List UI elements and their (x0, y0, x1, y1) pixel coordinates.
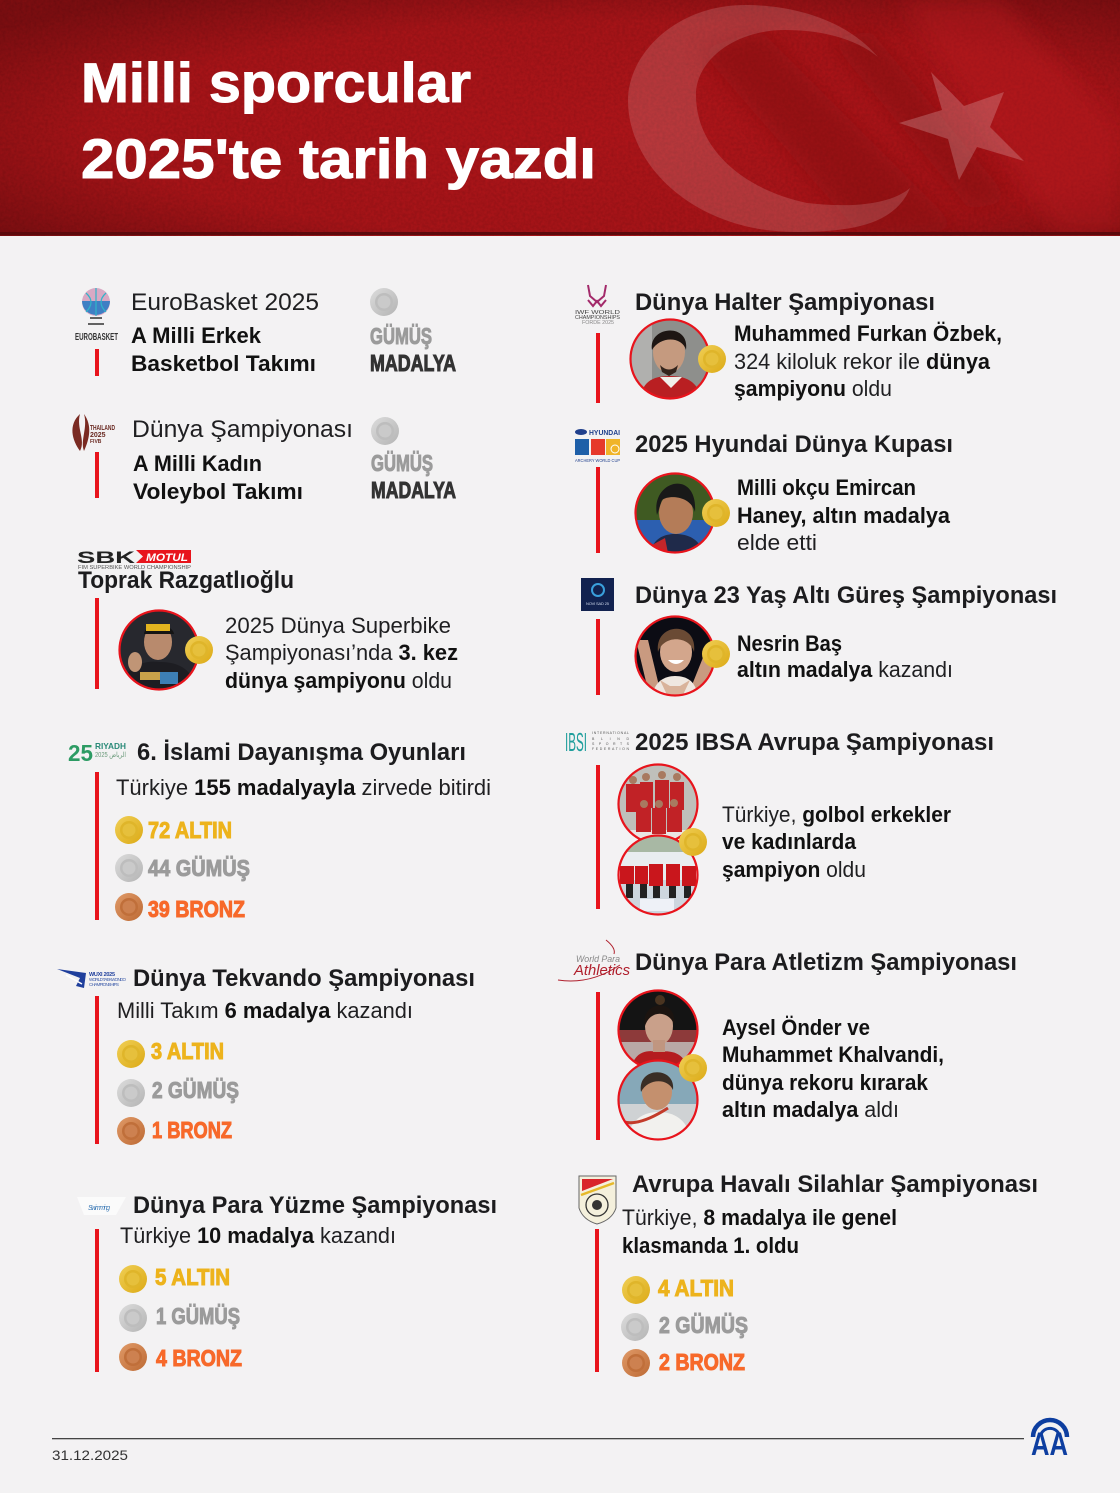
gold count (119, 1264, 230, 1293)
heading: Avrupa Havalı Silahlar Şampiyonası (632, 1171, 1038, 1198)
description: Aysel Önder ve (722, 1015, 870, 1040)
description: dünya rekoru kırarak (722, 1070, 929, 1095)
panel: Avrupa Havalı Silahlar Şampiyonası (579, 1171, 1038, 1377)
silver count (117, 1077, 239, 1107)
description: 324 kiloluk rekor ile dünya (734, 349, 991, 374)
icon: silver medal (370, 288, 398, 316)
logo: Para Swimming: Swimming (88, 1205, 110, 1212)
logo: Wuxi 2025: CHAMPIONSHIPS (89, 982, 119, 987)
description: Haney, altın madalya (737, 503, 951, 528)
heading: Dünya 23 Yaş Altı Güreş Şampiyonası (635, 582, 1057, 609)
team name: A Milli Erkek (131, 323, 262, 348)
accent bar (95, 349, 99, 376)
accent bar (95, 772, 99, 920)
bronze count: 1 BRONZ (152, 1117, 232, 1143)
logo: Riyadh 2025 (68, 740, 126, 766)
panel: 6. İslami Dayanışma Oyunları (68, 739, 491, 922)
team name: Basketbol Takımı (131, 351, 316, 376)
bronze count (117, 1117, 232, 1145)
icon: gold medal (185, 636, 213, 664)
logo: IWF: IWF WORLD (575, 310, 620, 316)
logo: Riyadh 2025: 25 (68, 740, 93, 766)
medal label: MADALYA (370, 350, 456, 376)
athlete name: Toprak Razgatlıoğlu (78, 567, 294, 594)
accent bar (596, 467, 600, 553)
title: 2025'te tarih yazdı (81, 127, 596, 190)
description (722, 802, 951, 882)
logo: Wuxi 2025 (57, 969, 126, 988)
description: Şampiyonası’nda 3. kez (225, 640, 458, 665)
photo: goalball men team (618, 764, 698, 844)
logo: IBSA: INTERNATIONAL (592, 731, 629, 735)
silver count: 2 GÜMÜŞ (659, 1312, 748, 1338)
logo: Wuxi 2025: WUXI 2025 (89, 972, 115, 978)
accent bar (95, 996, 99, 1144)
event heading: EuroBasket 2025 (131, 289, 319, 316)
icon: gold medal (679, 828, 707, 856)
gold count: 5 ALTIN (155, 1264, 230, 1290)
accent bar (596, 992, 600, 1140)
description (722, 1015, 944, 1122)
logo: Hyundai Archery World Cup (575, 429, 620, 463)
crescent (628, 5, 910, 232)
gold count (117, 1038, 224, 1068)
accent bar (95, 452, 99, 498)
description: altın madalya kazandı (737, 657, 953, 682)
description: ve kadınlarda (722, 829, 857, 854)
description: Milli okçu Emircan (737, 475, 916, 500)
logo: shooting federation shield (579, 1176, 616, 1224)
event heading: Dünya Şampiyonası (132, 416, 353, 443)
panel: Dünya 23 Yaş Altı Güreş Şampiyonası (581, 578, 1057, 697)
panel: Dünya Para Atletizm Şampiyonası (558, 940, 1017, 1142)
description: Türkiye, 8 madalya ile genel (622, 1205, 897, 1230)
logo: SBK Motul: MOTUL (146, 552, 188, 564)
description: Nesrin Baş (737, 631, 842, 656)
logo: Para Swimming (77, 1197, 126, 1215)
icon: AA logo: AA (1031, 1426, 1068, 1462)
icon: silver medal (371, 417, 399, 445)
gold count (622, 1275, 734, 1304)
heading: Dünya Para Yüzme Şampiyonası (133, 1192, 497, 1219)
star (899, 72, 1024, 180)
logo: volleyball championship: THAILAND (90, 425, 115, 432)
logo: World Para Athletics (558, 940, 630, 981)
panel: Dünya Para Yüzme Şampiyonası (77, 1192, 497, 1372)
bronze count: 4 BRONZ (156, 1345, 242, 1371)
logo: Hyundai Archery World Cup: HYUNDAI (589, 430, 620, 437)
medal label: GÜMÜŞ (371, 450, 433, 476)
heading: 6. İslami Dayanışma Oyunları (137, 739, 466, 766)
photo: Muhammed Furkan Özbek (630, 319, 710, 400)
gold count: 3 ALTIN (151, 1038, 224, 1064)
panel: 2025 Hyundai Dünya Kupası (575, 429, 953, 555)
description (737, 475, 951, 555)
description (622, 1205, 897, 1258)
logo: EuroBasket: EUROBASKET (75, 332, 118, 343)
photo: Muhammet Khalvandi (618, 1060, 698, 1142)
silver count (115, 854, 250, 882)
bronze count (115, 893, 245, 922)
gold count: 72 ALTIN (148, 817, 232, 843)
footer rule (52, 1438, 1024, 1439)
description: Milli Takım 6 madalya kazandı (117, 998, 413, 1023)
bronze count (119, 1343, 242, 1371)
icon: gold medal (679, 1054, 707, 1082)
logo: Riyadh 2025: RIYADH (95, 741, 126, 751)
logo: Riyadh 2025: 2025 الرياض (95, 751, 126, 759)
logo: Wuxi 2025: WORLD TAEKWONDO (89, 977, 126, 982)
logo: IWF: CHAMPIONSHIPS (575, 315, 620, 321)
logo: IBSA: IBSI (565, 727, 587, 757)
photo: goalball women team (618, 835, 698, 915)
description: Türkiye 10 madalya kazandı (120, 1223, 396, 1248)
icon: gold medal (698, 345, 726, 373)
silver count: 2 GÜMÜŞ (152, 1077, 239, 1103)
silver count (621, 1312, 748, 1341)
logo: Hyundai Archery World Cup: ARCHERY WORLD CUP (575, 458, 620, 463)
logo: World Para Athletics: World Para (576, 954, 620, 965)
description (734, 321, 1002, 401)
photo: Emircan Haney (635, 473, 715, 555)
medal label: MADALYA (371, 477, 456, 503)
description: altın madalya aldı (722, 1097, 899, 1122)
silver count (119, 1303, 240, 1332)
title (81, 51, 596, 190)
description (737, 631, 953, 682)
accent bar (596, 333, 600, 403)
logo: SBK Motul: SBK (77, 548, 136, 567)
team name (131, 323, 316, 376)
logo: IBSA: BLIND (592, 737, 629, 741)
silver count: 1 GÜMÜŞ (156, 1303, 240, 1329)
logo: U23 wrestling (581, 578, 614, 611)
accent bar (95, 1229, 99, 1372)
header banner with flag (0, 0, 1120, 236)
panel: EuroBasket 2025 (75, 288, 456, 376)
bronze count: 2 BRONZ (659, 1349, 745, 1375)
heading: 2025 IBSA Avrupa Şampiyonası (635, 729, 994, 756)
heading: 2025 Hyundai Dünya Kupası (635, 431, 953, 458)
description: Muhammet Khalvandi, (722, 1042, 944, 1067)
panel: Dünya Şampiyonası voleybol (72, 414, 456, 504)
bronze count (622, 1349, 745, 1377)
description: klasmanda 1. oldu (622, 1233, 799, 1258)
logo: SBK Motul: FIM SUPERBIKE WORLD CHAMPIONSHIP (78, 565, 192, 571)
medal label (370, 323, 456, 376)
logo: IBSA: SPORTS (592, 742, 630, 746)
accent bar (596, 765, 600, 909)
team name: Voleybol Takımı (133, 479, 303, 504)
description: şampiyon oldu (722, 857, 866, 882)
logo: volleyball championship: 2025 (90, 432, 106, 439)
description: şampiyonu oldu (734, 376, 892, 401)
description: dünya şampiyonu oldu (225, 668, 452, 693)
logo: SBK Motul (77, 548, 192, 571)
heading: Dünya Halter Şampiyonası (635, 289, 935, 316)
silver count: 44 GÜMÜŞ (148, 855, 250, 881)
logo: IBSA: FEDERATION (592, 747, 629, 751)
logo: IWF: FORDE 2025 (582, 320, 614, 326)
heading: Dünya Tekvando Şampiyonası (133, 965, 475, 992)
description (225, 613, 458, 693)
logo: U23 wrestling: NOVI SAD 25 (586, 601, 610, 606)
accent bar (596, 619, 600, 695)
panel: Dünya Tekvando Şampiyonası (57, 965, 475, 1145)
photo: Toprak (119, 610, 199, 690)
heading: Dünya Para Atletizm Şampiyonası (635, 949, 1017, 976)
icon: gold medal (702, 499, 730, 527)
description: Türkiye, golbol erkekler (722, 802, 951, 827)
gold count (115, 816, 232, 844)
logo: IWF (575, 285, 620, 326)
panel: Dünya Halter Şampiyonası (575, 285, 1002, 403)
icon: gold medal (702, 640, 730, 668)
description: Türkiye 155 madalyayla zirvede bitirdi (116, 775, 491, 800)
medal label: GÜMÜŞ (370, 323, 432, 349)
description: elde etti (737, 530, 817, 555)
logo: volleyball championship: FIVB (90, 439, 102, 445)
panel: 2025 IBSA Avrupa Şampiyonası (565, 727, 994, 915)
date: 31.12.2025 (52, 1447, 128, 1463)
accent bar (595, 1229, 599, 1372)
panel: Toprak Razgatlıoğlu (77, 548, 458, 693)
logo: volleyball championship (72, 414, 115, 451)
title: Milli sporcular (81, 51, 471, 114)
logo: World Para Athletics: Athletics (573, 962, 630, 979)
description: Muhammed Furkan Özbek, (734, 321, 1002, 346)
logo: EuroBasket (75, 288, 118, 343)
bronze count: 39 BRONZ (148, 896, 245, 922)
medal label (371, 450, 456, 503)
team name (133, 451, 303, 504)
accent bar (95, 598, 99, 689)
description: 2025 Dünya Superbike (225, 613, 451, 638)
photo: Nesrin Baş (635, 616, 716, 697)
team name: A Milli Kadın (133, 451, 262, 476)
gold count: 4 ALTIN (658, 1275, 734, 1301)
photo: Aysel Önder (618, 990, 698, 1072)
